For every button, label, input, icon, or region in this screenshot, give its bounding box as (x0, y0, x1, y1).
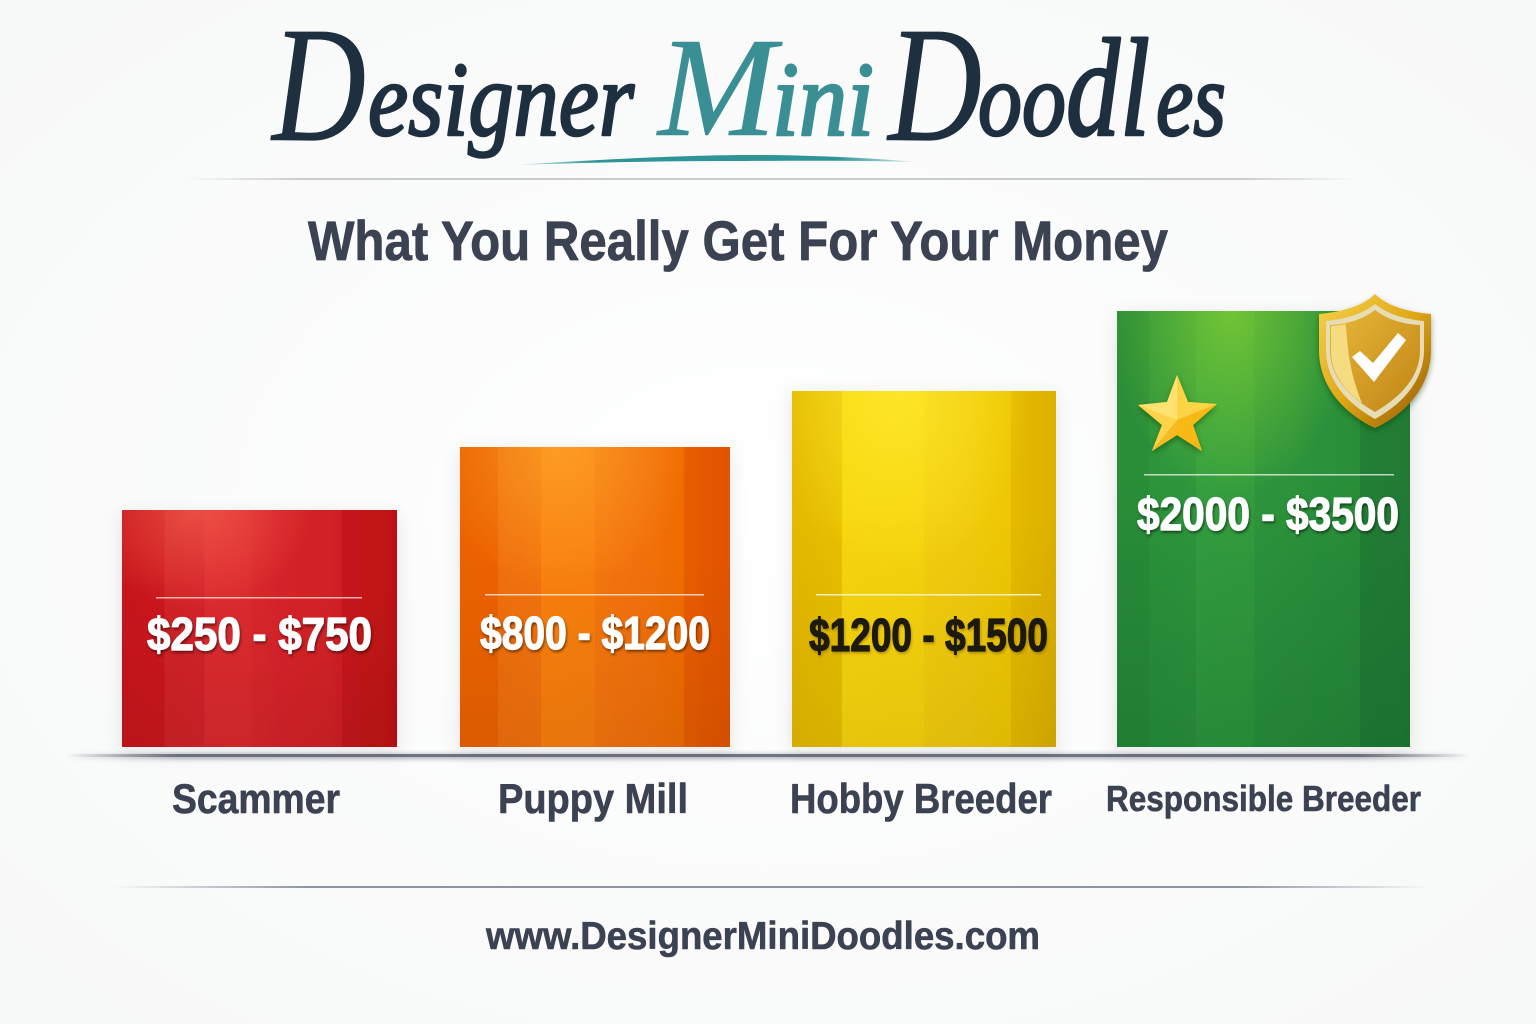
label: Hobby Breeder: Hobby Breeder (790, 775, 1052, 822)
price: Responsible Breeder: $2000 - $3500 (1137, 488, 1399, 540)
bar: Scammer (122, 510, 397, 747)
label: Scammer: Scammer (172, 775, 340, 822)
icon: shield with check (1319, 294, 1431, 428)
price: Puppy Mill: $800 - $1200 (480, 607, 710, 659)
label: Responsible Breeder: Responsible Breeder (1106, 778, 1421, 819)
website url: www.DesignerMiniDoodles.com (485, 915, 1040, 958)
baseline (66, 754, 1470, 759)
brand logo title: M (656, 8, 783, 166)
brand logo title: ini (772, 41, 874, 158)
bar: Responsible Breeder (1117, 294, 1431, 747)
bar: Puppy Mill (460, 447, 730, 747)
brand logo title: oo (978, 41, 1066, 158)
brand logo title: dl (1066, 11, 1150, 166)
label: Puppy Mill: Puppy Mill (498, 775, 688, 822)
brand logo title: es (1156, 41, 1226, 158)
logo swoosh (516, 155, 916, 165)
price: Scammer: $250 - $750 (147, 608, 372, 660)
subtitle: What You Really Get For Your Money (308, 209, 1168, 272)
price: Hobby Breeder: $1200 - $1500 (809, 609, 1048, 661)
bar: Hobby Breeder (792, 391, 1056, 747)
brand logo title: esigner (368, 41, 635, 158)
icon: star (1138, 375, 1217, 451)
brand logo title (270, 0, 1226, 176)
